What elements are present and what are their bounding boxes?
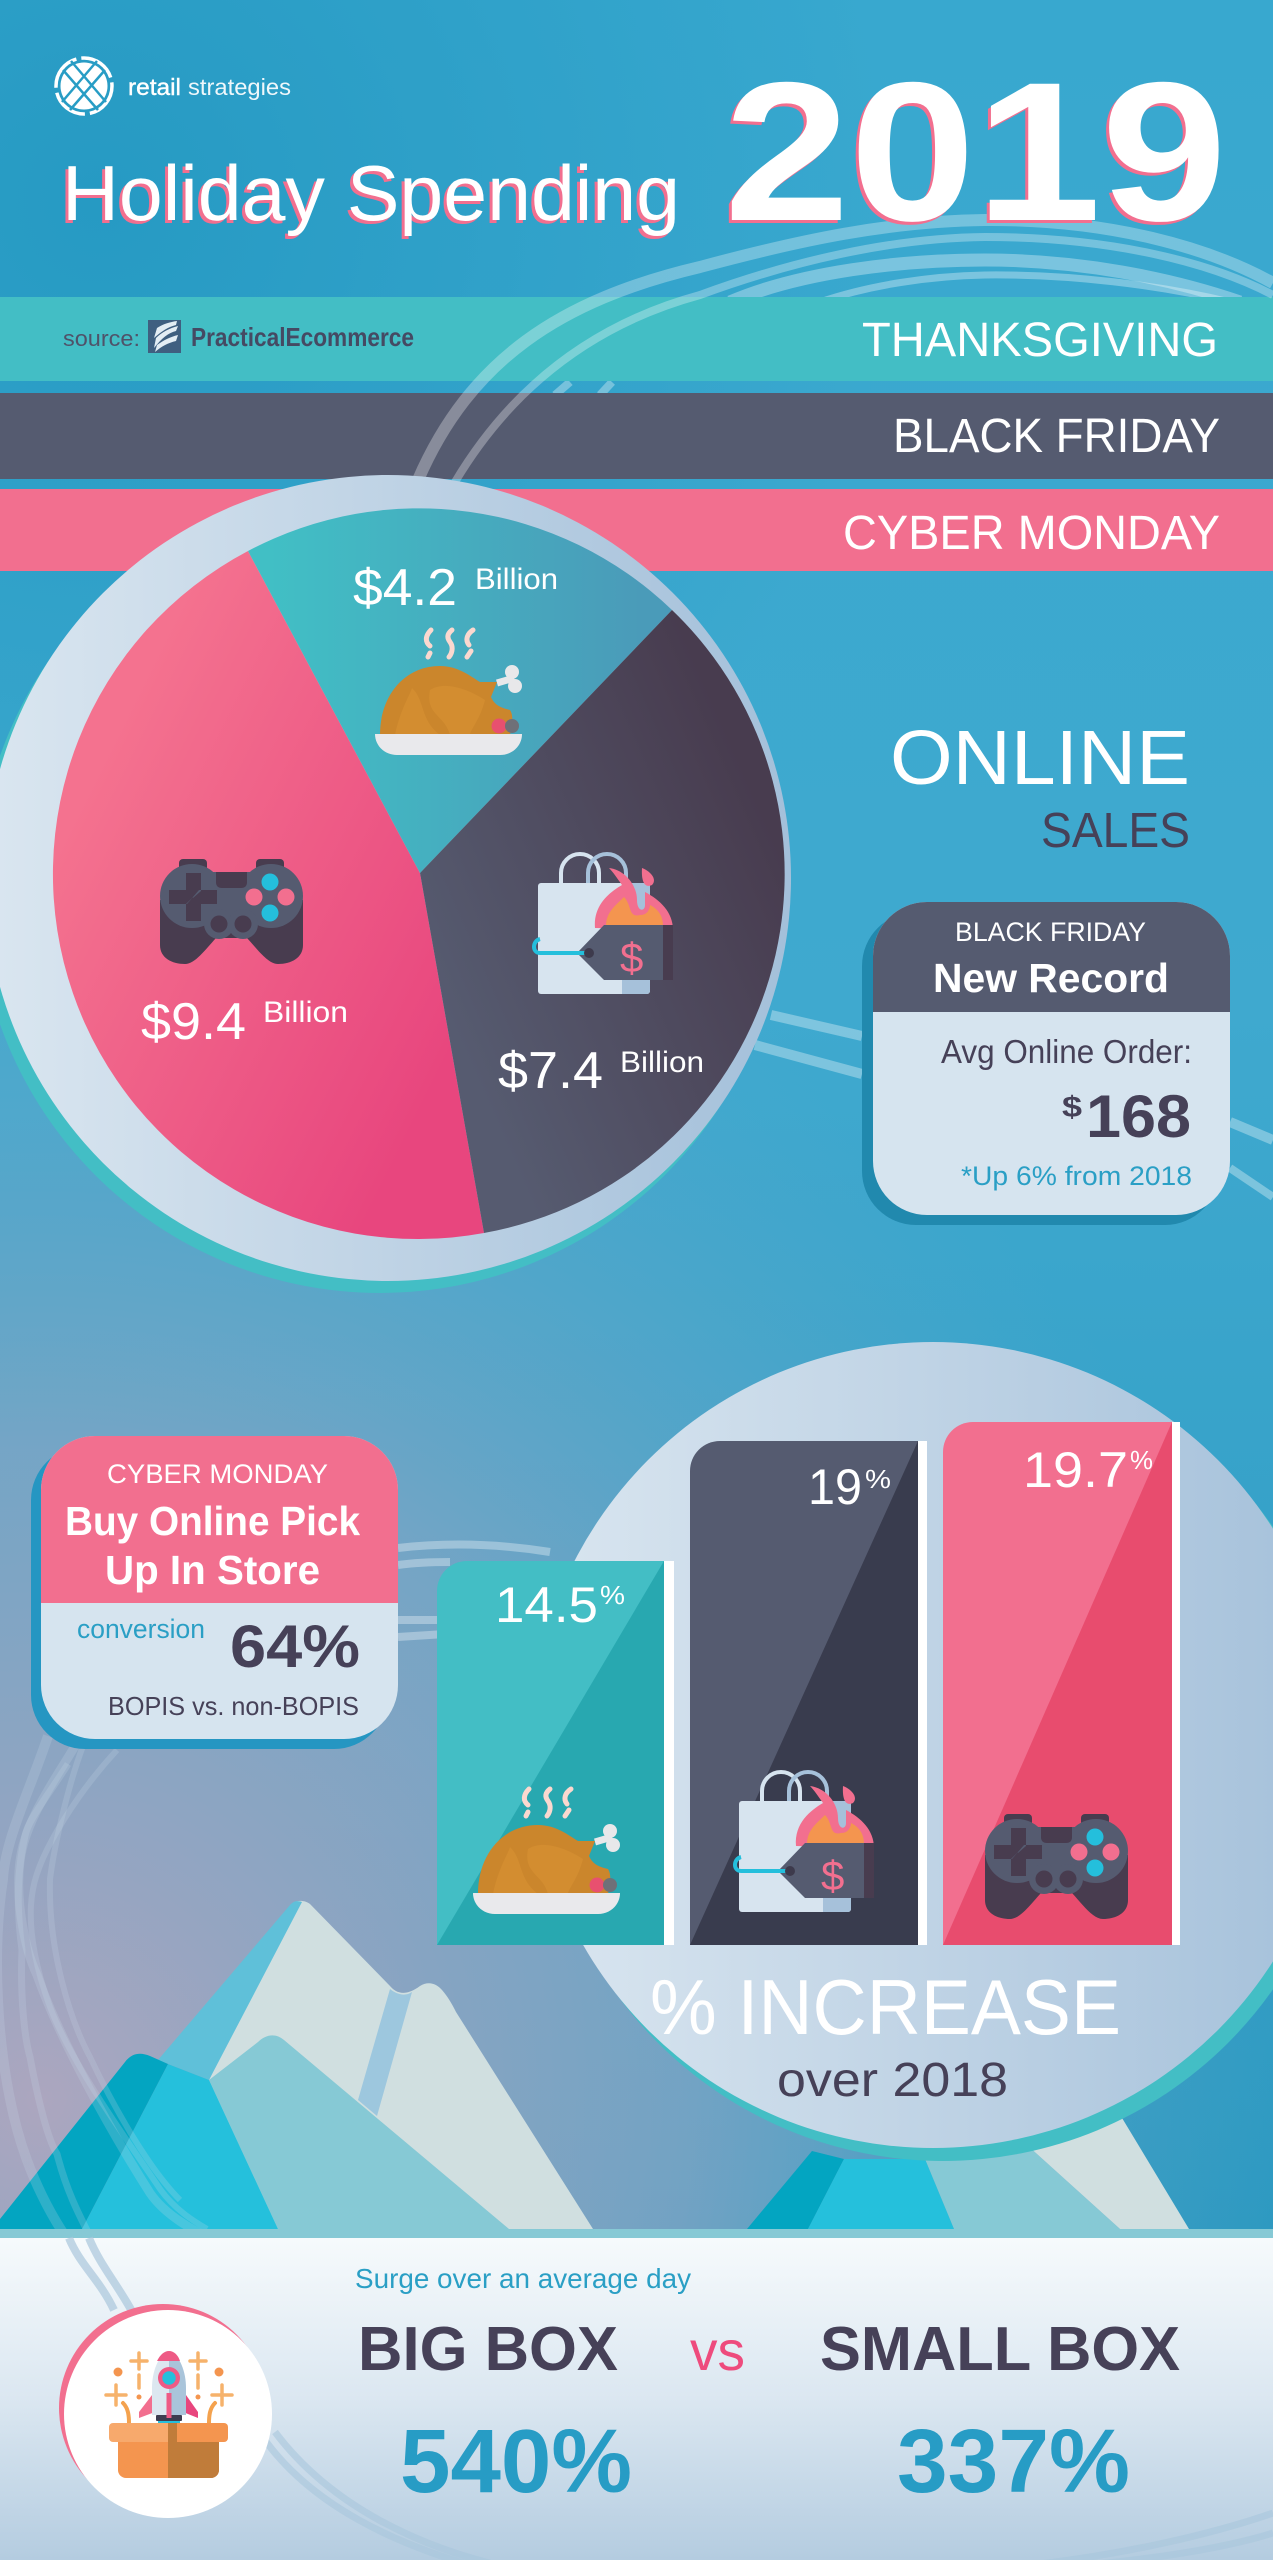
label: $7.4 Billion — [498, 1042, 704, 1100]
heading: Small Box: SMALL BOX — [820, 2315, 1180, 2384]
band: Thanksgiving: THANKSGIVING — [862, 314, 1218, 367]
panel: big box vs small box: vs — [690, 2319, 745, 2382]
icon: roast turkey — [473, 1789, 620, 1914]
card: Black Friday new record — [862, 902, 1230, 1225]
heading: Online Sales: ONLINE — [890, 715, 1190, 801]
icon: game controller — [985, 1814, 1128, 1919]
band: Black Friday — [0, 393, 1273, 479]
icon: rocket launching from a box — [59, 2304, 272, 2518]
card: Black Friday new record: 168 — [1086, 1083, 1191, 1150]
icon: game controller — [160, 859, 303, 964]
band: Black Friday: BLACK FRIDAY — [893, 410, 1220, 463]
pie slice: Thanksgiving — [248, 508, 672, 873]
pie slice: Cyber Monday — [53, 551, 484, 1239]
card: Cyber Monday buy online pick up in store: CYBER MONDAY — [107, 1459, 328, 1489]
icon: shopping bag with burning price tag — [735, 1772, 874, 1912]
heading: Big Box — [358, 2315, 632, 2512]
source credit: source: — [63, 326, 140, 351]
card: Cyber Monday buy online pick up in store: Up In Store — [105, 1547, 320, 1593]
card: Black Friday new record: $ — [1062, 1091, 1082, 1124]
label: $4.2 Billion: Billion — [475, 563, 558, 596]
bar: Thanksgiving 14.5% — [437, 1561, 674, 1945]
bar: Cyber Monday 19.7%: 19.7 — [1023, 1442, 1128, 1498]
band: Cyber Monday: CYBER MONDAY — [843, 507, 1220, 560]
bar: Thanksgiving 14.5%: 14.5 — [495, 1577, 598, 1633]
label: $7.4 Billion: $7.4 — [498, 1042, 603, 1100]
label: $9.4 Billion: Billion — [263, 996, 348, 1029]
bar: Black Friday 19%: % — [865, 1464, 891, 1494]
card: Black Friday new record: New Record — [933, 955, 1169, 1001]
label: $4.2 Billion: $4.2 — [353, 559, 457, 617]
caption: % increase over 2018: % INCREASE — [650, 1963, 1121, 2051]
icon: roast turkey — [375, 630, 522, 755]
heading: Big Box: BIG BOX — [358, 2315, 618, 2384]
heading: Small Box: 337% — [897, 2412, 1130, 2512]
card: Black Friday new record: BLACK FRIDAY — [955, 917, 1146, 947]
card: Cyber Monday buy online pick up in store: conversion — [77, 1614, 205, 1644]
pie slice: Black Friday — [420, 610, 785, 1233]
panel: online sales pie chart — [0, 475, 791, 1293]
card: Black Friday new record: Avg Online Order: — [941, 1033, 1192, 1070]
card: Cyber Monday buy online pick up in store — [31, 1436, 398, 1749]
bar: Cyber Monday 19.7% — [943, 1422, 1180, 1945]
swirl lines over left mountains — [0, 1736, 213, 2260]
mountains: left range — [0, 1901, 593, 2229]
source credit: PracticalEcommerce — [191, 322, 414, 352]
bar: Black Friday 19%: 19 — [808, 1459, 862, 1515]
card: Cyber Monday buy online pick up in store: BOPIS vs. non-BOPIS — [108, 1691, 359, 1721]
card: Cyber Monday buy online pick up in store: Buy Online Pick — [65, 1498, 360, 1544]
card: Black Friday new record: *Up 6% from 2018 — [961, 1161, 1192, 1191]
bar: Black Friday 19% — [690, 1441, 927, 1945]
bar: Thanksgiving 14.5%: % — [600, 1580, 625, 1610]
icon: shopping bag with burning price tag: $ — [620, 934, 643, 981]
logo: retail strategies — [56, 58, 291, 114]
caption: % increase over 2018 — [650, 1963, 1121, 2107]
heading: Online Sales: SALES — [1041, 804, 1190, 858]
heading: Small Box — [820, 2315, 1180, 2512]
panel: big box vs small box — [0, 2229, 1273, 2560]
swirl lines behind bands — [398, 260, 1273, 1637]
panel: big box vs small box: Surge over an average day — [355, 2263, 691, 2294]
icon: shopping bag with burning price tag: $ — [821, 1852, 844, 1899]
title: Holiday Spending: Holiday Spending — [62, 149, 680, 237]
source credit — [63, 320, 414, 353]
label: $9.4 Billion: $9.4 — [141, 993, 246, 1051]
logo: retail strategies: retail — [128, 74, 181, 100]
heading: Online Sales — [890, 715, 1190, 858]
mountains: right range — [747, 2108, 1189, 2229]
swirl lines over bands — [418, 220, 1273, 482]
logo: retail strategies: strategies — [188, 74, 291, 100]
title: 2019: 2019 — [724, 41, 1227, 262]
label: $9.4 Billion — [141, 993, 348, 1051]
band: Thanksgiving — [0, 297, 1273, 381]
heading: Big Box: 540% — [400, 2412, 632, 2512]
caption: % increase over 2018: over 2018 — [777, 2054, 1008, 2107]
panel: percent increase circle — [437, 1342, 1273, 2161]
label: $7.4 Billion: Billion — [620, 1046, 704, 1079]
label: $4.2 Billion — [353, 559, 558, 617]
icon: shopping bag with burning price tag — [534, 854, 673, 994]
band: Cyber Monday — [0, 489, 1273, 571]
card: Cyber Monday buy online pick up in store: 64% — [230, 1613, 360, 1680]
bar: Cyber Monday 19.7%: % — [1130, 1445, 1153, 1475]
